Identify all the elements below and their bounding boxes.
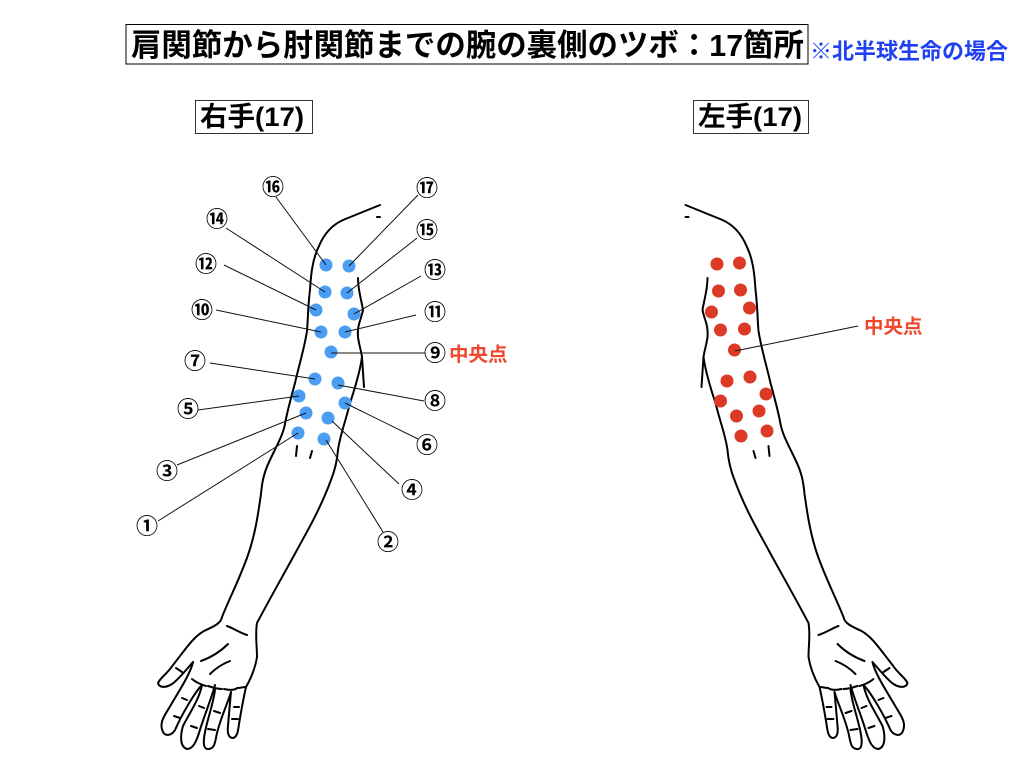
point numbers: right arm: ⑨ <box>424 336 446 368</box>
point numbers: right arm: ⑦ <box>184 344 206 376</box>
point numbers: right arm: ② <box>377 525 399 557</box>
point numbers: right arm: ⑯ <box>262 170 284 202</box>
point numbers: right arm: ① <box>136 509 158 541</box>
point numbers: right arm: ⑫ <box>195 247 217 279</box>
left arm outline <box>686 205 908 749</box>
point numbers: right arm: ⑭ <box>206 202 228 234</box>
title: 肩関節から肘関節までの腕の裏側のツボ：17箇所 <box>131 28 804 63</box>
point numbers: right arm: ⑤ <box>177 392 199 424</box>
acupoints: right arm (blue) <box>292 258 360 446</box>
right arm outline <box>158 205 380 749</box>
point numbers: right arm: ⑬ <box>424 253 446 285</box>
point numbers: right arm <box>136 170 446 557</box>
label: center point (left arm): 中央点 <box>864 316 923 338</box>
point numbers: right arm: ⑰ <box>416 171 438 203</box>
point numbers: right arm: ⑧ <box>424 384 446 416</box>
heading: right hand: 右手(17) <box>200 102 304 132</box>
point numbers: right arm: ⑥ <box>416 428 438 460</box>
point numbers: right arm: ⑮ <box>416 213 438 245</box>
acupoints: left arm (red) <box>705 256 774 442</box>
note: northern hemisphere: ※北半球生命の場合 <box>810 39 1008 64</box>
point numbers: right arm: ⑪ <box>424 295 446 327</box>
point numbers: right arm: ④ <box>401 473 423 505</box>
label: center point (right arm): 中央点 <box>449 344 508 366</box>
heading: left hand: 左手(17) <box>698 102 802 132</box>
leader lines: right arm <box>158 195 425 532</box>
point numbers: right arm: ⑩ <box>191 293 213 325</box>
point numbers: right arm: ③ <box>156 454 178 486</box>
leader line: center point (left arm) <box>735 326 858 351</box>
